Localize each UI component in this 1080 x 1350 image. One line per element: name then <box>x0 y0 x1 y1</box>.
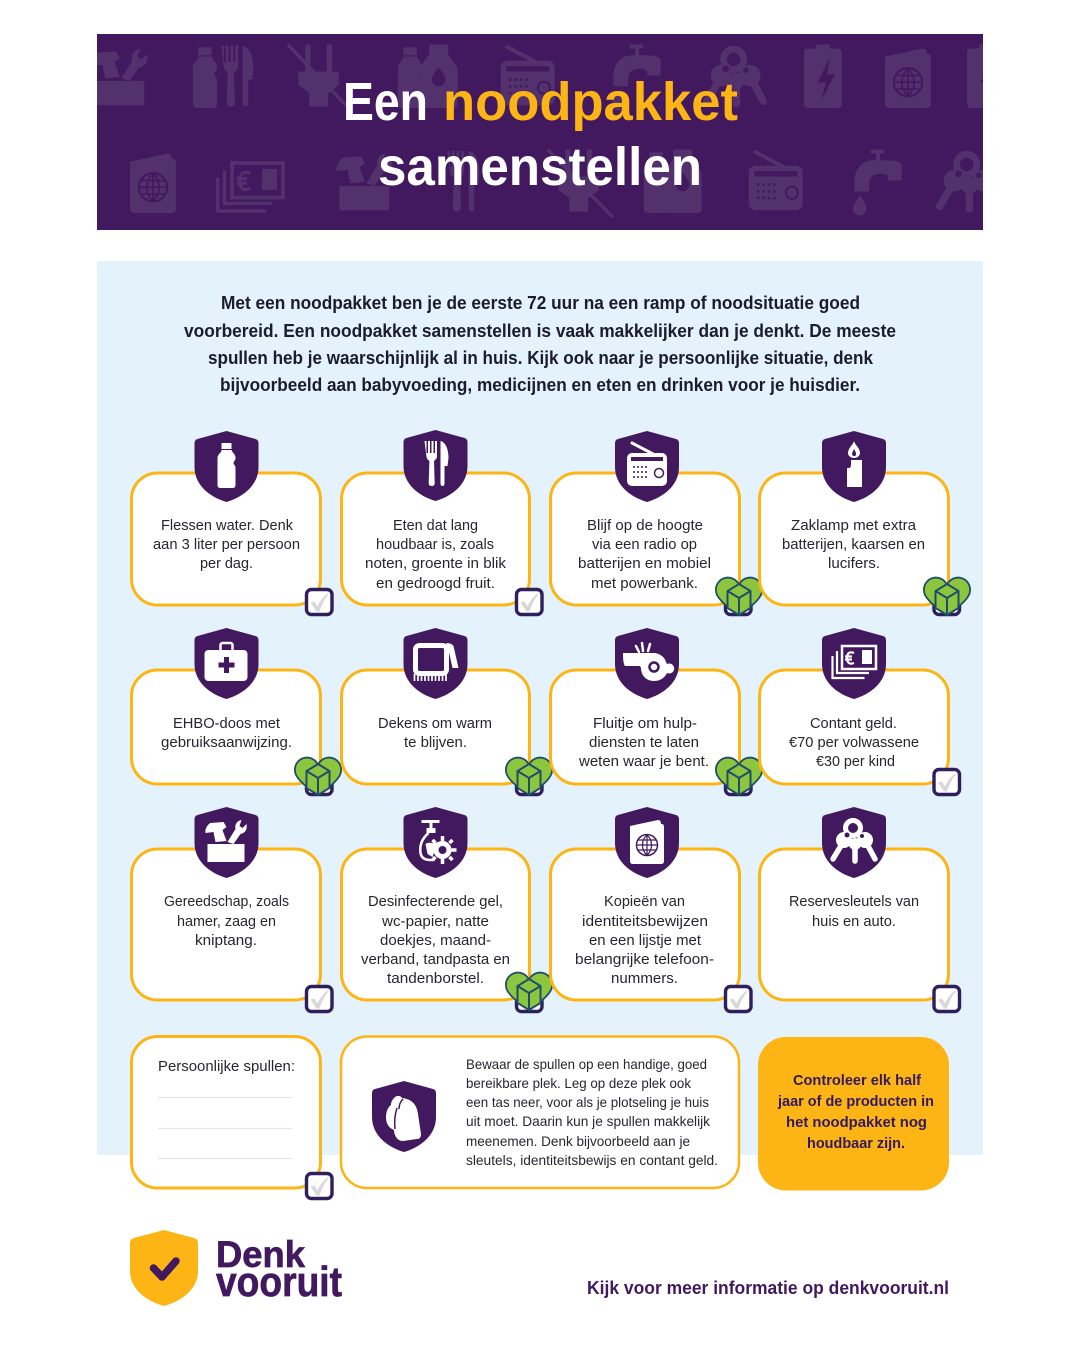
text: tools: Gereedschap, zoals <box>164 893 289 910</box>
text: keys <box>789 893 919 930</box>
icon: sanitizer <box>404 807 468 878</box>
text: tools: kniptang. <box>195 932 257 949</box>
intro text: spullen heb je waarschijnlijk al in huis. Kijk ook naar je persoonlijke situatie, denk <box>208 348 874 368</box>
text: first aid <box>161 715 292 751</box>
text: documents: en een lijstje met <box>589 932 702 949</box>
text: keys: huis en auto. <box>812 913 896 930</box>
text: hygiene: tandenborstel. <box>387 970 484 987</box>
icon: passport <box>615 807 679 878</box>
text: water: aan 3 liter per persoon <box>153 536 300 553</box>
text: first aid: gebruiksaanwijzing. <box>161 734 292 751</box>
text: tools: hamer, zaag en <box>177 913 276 930</box>
text: cash <box>789 715 919 770</box>
text: food <box>365 517 507 592</box>
footer link text: Kijk voor meer informatie op denkvooruit.nl <box>587 1278 949 1298</box>
icon: radio <box>615 431 679 502</box>
text: flashlight: lucifers. <box>828 555 880 572</box>
checkbox <box>934 986 960 1012</box>
text: cash: Contant geld. <box>810 715 897 732</box>
card: whistle <box>550 628 762 795</box>
checkbox with green heart package <box>716 578 762 615</box>
header background icon pattern <box>91 44 1005 217</box>
checkbox with green heart package <box>506 973 552 1012</box>
text: radio: met powerbank. <box>591 575 698 592</box>
text: keys: Reservesleutels van <box>789 893 919 910</box>
checkbox with green heart package <box>295 758 341 795</box>
icon: blanket <box>404 628 468 699</box>
text: whistle <box>578 715 709 770</box>
card: cash <box>760 628 960 794</box>
text: food: houdbaar is, zoals <box>376 536 494 553</box>
card: water <box>132 431 332 614</box>
text: whistle: weten waar je bent. <box>578 753 709 770</box>
text: documents: belangrijke telefoon- <box>575 951 714 968</box>
checkbox <box>516 590 542 614</box>
checkbox with green heart package <box>924 578 970 615</box>
icon: fork and knife <box>404 430 468 501</box>
text: personal items: Persoonlijke spullen: <box>158 1058 295 1075</box>
text: documents: nummers. <box>611 970 678 987</box>
card: storage advice <box>341 1036 739 1188</box>
text: water <box>153 517 300 572</box>
intro text <box>184 293 896 395</box>
callout: check every six months: het noodpakket nog <box>786 1114 927 1131</box>
icon: toolbox <box>194 807 258 878</box>
icon: money <box>822 628 886 699</box>
text: radio: Blijf op de hoogte <box>587 517 703 534</box>
callout: check every six months: jaar of de producten in <box>777 1093 934 1110</box>
text: flashlight: batterijen, kaarsen en <box>782 536 925 553</box>
icon: candle <box>822 431 886 502</box>
card: first aid <box>132 628 341 795</box>
text: blankets <box>378 715 492 751</box>
callout: check every six months: houdbaar zijn. <box>807 1135 905 1152</box>
logo: Denk vooruit: vooruit <box>216 1258 342 1305</box>
card: keys <box>760 807 960 1012</box>
text: radio: via een radio op <box>592 536 697 553</box>
checkbox with green heart package <box>506 758 552 795</box>
checkbox with green heart package <box>716 758 762 795</box>
icon: first aid kit <box>194 628 258 699</box>
checkbox <box>306 1174 332 1198</box>
text: water: Flessen water. Denk <box>161 517 293 534</box>
text: documents: Kopieën van <box>604 893 685 910</box>
text: food: en gedroogd fruit. <box>376 575 495 592</box>
logo: Denk vooruit <box>130 1230 342 1306</box>
card: flashlight <box>760 431 970 615</box>
text: storage advice: sleutels, identiteitsbewijs en contant geld. <box>466 1152 718 1168</box>
checkbox <box>934 770 960 794</box>
checkbox <box>306 590 332 614</box>
title: samenstellen <box>378 137 702 197</box>
text: tools <box>164 893 289 949</box>
text: whistle: Fluitje om hulp- <box>593 715 697 732</box>
text: flashlight: Zaklamp met extra <box>791 517 917 534</box>
text: cash: €30 per kind <box>816 753 895 770</box>
intro text: bijvoorbeeld aan babyvoeding, medicijnen en eten en drinken voor je huisdier. <box>220 375 860 395</box>
intro text: Met een noodpakket ben je de eerste 72 uur na een ramp of noodsituatie goed <box>221 293 860 313</box>
text: hygiene <box>361 893 510 987</box>
callout: check every six months <box>758 1037 949 1190</box>
icon: whistle <box>615 628 679 699</box>
card: documents <box>550 807 751 1012</box>
title: Een <box>343 72 428 132</box>
title <box>343 72 738 197</box>
text: radio <box>578 517 711 592</box>
text: water: per dag. <box>200 555 253 572</box>
callout: check every six months: Controleer elk half <box>793 1072 922 1089</box>
text: cash: €70 per volwassene <box>789 734 919 751</box>
text: storage advice: uit moet. Daarin kun je spullen makkelijk <box>466 1113 711 1129</box>
text: blankets: Dekens om warm <box>378 715 492 732</box>
checkbox <box>306 986 332 1012</box>
text: documents <box>575 893 714 987</box>
text: hygiene: wc-papier, natte <box>381 913 489 930</box>
logo: Denk vooruit: Denk <box>216 1234 305 1275</box>
text: storage advice: bereikbare plek. Leg op deze plek ook <box>466 1075 692 1091</box>
icon: bottle <box>194 431 258 502</box>
card: personal items <box>132 1036 332 1198</box>
checkbox <box>726 986 751 1012</box>
icon: keys <box>822 807 886 878</box>
text: hygiene: Desinfecterende gel, <box>368 893 503 910</box>
card: tools <box>132 807 332 1012</box>
icon: backpack <box>372 1081 436 1152</box>
card: radio <box>550 431 762 615</box>
text: documents: identiteitsbewijzen <box>582 913 708 930</box>
header banner <box>91 34 1005 230</box>
text: storage advice: Bewaar de spullen op een handige, goed <box>466 1056 707 1072</box>
card: food <box>342 430 542 614</box>
card: hygiene <box>342 807 552 1012</box>
text: storage advice <box>466 1056 718 1168</box>
text: blankets: te blijven. <box>404 734 467 751</box>
text: storage advice: een tas neer, voor als je plotseling je huis <box>466 1094 709 1110</box>
text: hygiene: verband, tandpasta en <box>361 951 510 968</box>
text: flashlight <box>782 517 925 572</box>
text: food: noten, groente in blik <box>365 555 507 572</box>
text: storage advice: meenemen. Denk bijvoorbeeld aan je <box>466 1133 690 1149</box>
text: food: Eten dat lang <box>393 517 478 534</box>
text: first aid: EHBO-doos met <box>173 715 281 732</box>
text: whistle: diensten te laten <box>589 734 699 751</box>
intro text: voorbereid. Een noodpakket samenstellen is vaak makkelijker dan je denkt. De meeste <box>184 321 896 341</box>
card: blankets <box>342 628 552 795</box>
light blue panel <box>97 261 983 1155</box>
text: hygiene: doekjes, maand- <box>380 932 491 949</box>
text: radio: batterijen en mobiel <box>578 555 711 572</box>
title: noodpakket <box>443 72 738 132</box>
